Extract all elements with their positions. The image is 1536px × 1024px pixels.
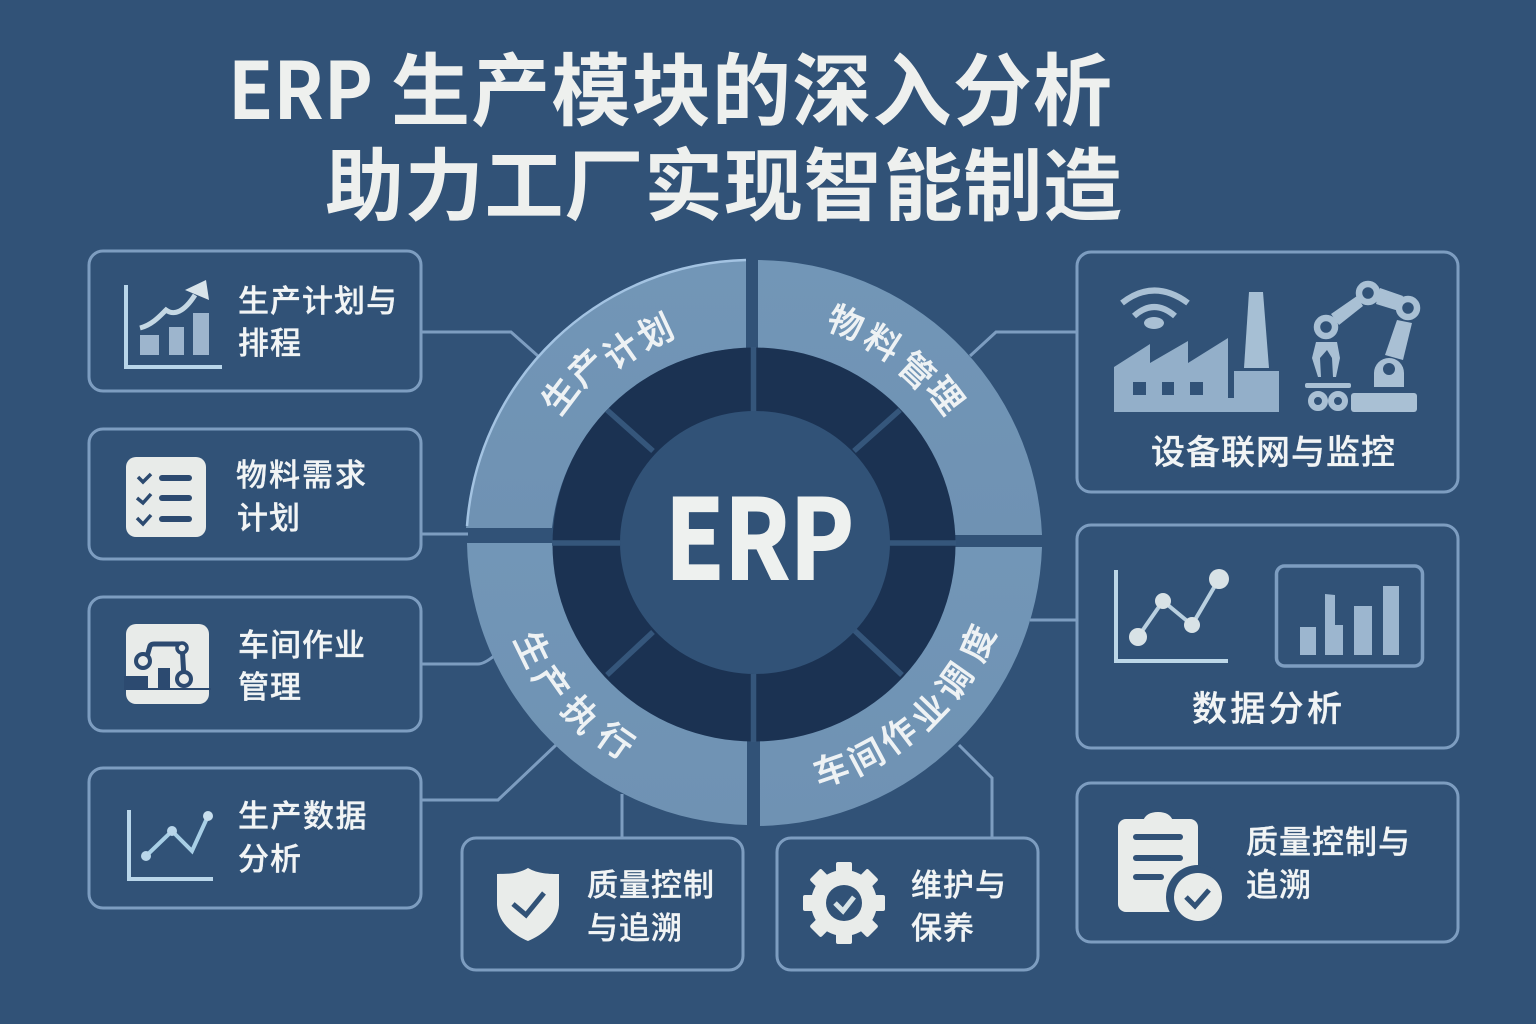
panel: production planning and scheduling — [89, 251, 421, 391]
center label ERP: ERP — [665, 451, 854, 611]
ring label: workshop operations: 作 — [868, 703, 927, 765]
icon: boxed bar chart — [1276, 566, 1422, 666]
label: 管理 — [238, 662, 302, 707]
ring label: production plan: 划 — [628, 299, 681, 360]
label: 质量控制与 — [1246, 817, 1411, 863]
label: 追溯 — [1246, 860, 1312, 906]
label: 保养 — [911, 903, 975, 948]
panel frame — [462, 838, 743, 970]
ring label: material management: 管 — [888, 339, 948, 400]
ring label: production execution: 行 — [588, 708, 646, 770]
icon: factory — [1114, 292, 1279, 412]
label — [238, 276, 398, 363]
icon: clipboard with check — [1118, 812, 1230, 929]
panel: production data analysis — [89, 768, 421, 908]
label — [911, 860, 1007, 948]
label — [238, 791, 368, 879]
label — [236, 450, 368, 538]
title: 生产模块的深入分析 — [391, 27, 1112, 142]
segment: production execution — [467, 543, 747, 825]
label: 生产数据 — [238, 791, 368, 836]
panel: data analysis — [1077, 525, 1458, 748]
ring label: workshop operations: 车 — [806, 738, 855, 798]
label: 设备联网与监控 — [1151, 425, 1395, 474]
segment: material management — [758, 260, 1042, 535]
icon: wifi — [1122, 290, 1188, 329]
segment: workshop operations — [760, 547, 1042, 826]
icon: gear with check — [803, 862, 885, 944]
title: 助力工厂实现智能制造 — [325, 122, 1122, 237]
panel frame — [89, 768, 421, 908]
label: 计划 — [237, 493, 301, 538]
ring label: production plan: 生 — [528, 365, 589, 424]
panel: maintenance — [777, 838, 1038, 970]
icon: line chart — [129, 810, 213, 879]
ring label: production execution: 产 — [522, 653, 584, 711]
icon: bar chart with rising arrow — [126, 280, 222, 367]
icon: robot arm — [1305, 284, 1417, 412]
label: 车间作业 — [238, 620, 366, 665]
panel: workshop operations management — [89, 597, 421, 731]
panel: material requirements planning — [89, 429, 421, 559]
label: 物料需求 — [236, 450, 368, 495]
panel: quality control (bottom) — [462, 838, 743, 970]
label: 生产计划与 — [238, 276, 398, 321]
ring label: production plan: 计 — [591, 318, 649, 380]
ring label: material management: 物 — [821, 291, 872, 351]
ring label: workshop operations — [806, 616, 1006, 798]
ring label: production execution: 生 — [503, 622, 565, 675]
ring label: workshop operations: 调 — [922, 651, 984, 709]
icon: shield — [497, 868, 559, 941]
inner ring dividers — [552, 347, 956, 742]
icon: line chart — [1116, 569, 1229, 661]
connectors — [421, 332, 1077, 838]
label: 数据分析 — [1192, 681, 1342, 732]
highlight arc — [467, 260, 746, 526]
panel frame — [89, 429, 421, 559]
panel frame — [89, 251, 421, 391]
ring label: material management: 理 — [916, 365, 978, 424]
label: 维护与 — [911, 860, 1007, 905]
label — [1246, 817, 1411, 906]
ring label: workshop operations: 间 — [838, 724, 893, 786]
panel frame — [1077, 252, 1458, 492]
title: ERP — [228, 27, 373, 142]
center hub — [620, 411, 890, 674]
ring label: production plan — [528, 299, 681, 424]
dark inner ring — [552, 348, 956, 742]
label: 质量控制 — [587, 860, 715, 905]
segment: production plan — [466, 259, 746, 528]
label: 排程 — [238, 318, 302, 363]
label: 分析 — [238, 834, 302, 879]
panel frame — [1077, 783, 1458, 942]
title — [228, 27, 1122, 237]
ring label: production execution — [503, 622, 646, 770]
panel: equipment networking and monitoring — [1077, 252, 1458, 492]
icon: checklist — [126, 457, 206, 537]
label — [587, 860, 715, 948]
icon: robot arm tile — [124, 624, 211, 704]
ring label: material management — [821, 291, 978, 424]
panel frame — [89, 597, 421, 731]
ERP ring diagram — [466, 259, 1042, 826]
ring label: production plan: 产 — [555, 336, 615, 397]
ring label: workshop operations: 度 — [945, 616, 1006, 669]
label: 与追溯 — [587, 903, 683, 948]
label — [238, 620, 366, 707]
ring label: workshop operations: 业 — [898, 680, 959, 740]
panel frame — [777, 838, 1038, 970]
ring label: production execution: 执 — [551, 683, 612, 743]
panel frame — [1077, 525, 1458, 748]
ring label: material management: 料 — [855, 310, 912, 372]
panel: quality control and traceability — [1077, 783, 1458, 942]
